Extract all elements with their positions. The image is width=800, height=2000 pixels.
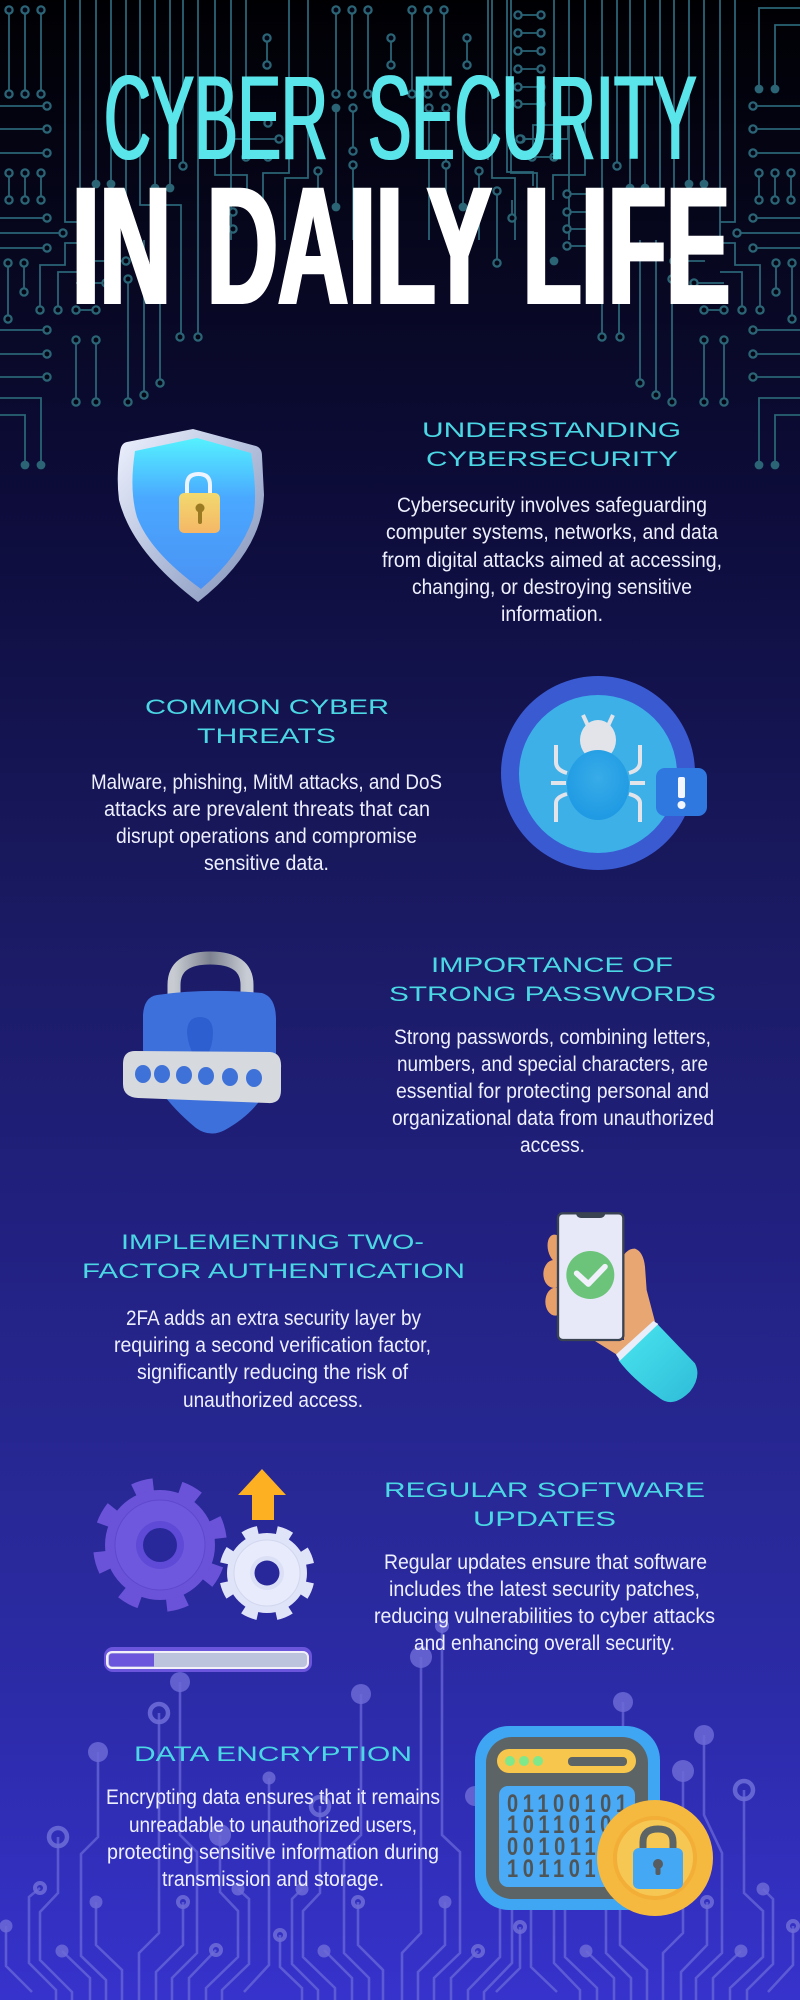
icon: bug alert badge <box>501 676 707 870</box>
body text: protecting sensitive information during <box>107 1840 439 1864</box>
title: CYBER SECURITY <box>104 51 697 185</box>
body text: disrupt operations and compromise <box>116 824 417 848</box>
body text: Malware, phishing, MitM attacks, and DoS <box>91 770 442 794</box>
top circuit pattern <box>0 0 800 469</box>
panel: regular software updates <box>80 1465 715 1672</box>
body text: significantly reducing the risk of <box>137 1360 408 1384</box>
body text <box>374 1550 715 1655</box>
body text: organizational data from unauthorized <box>392 1106 714 1130</box>
heading: COMMON CYBER <box>145 696 389 719</box>
icon: binary window with lock coin <box>475 1726 713 1916</box>
icon: hand holding phone with check <box>543 1213 697 1402</box>
heading: UPDATES <box>473 1508 616 1531</box>
body text: information. <box>501 602 603 626</box>
body text: attacks are prevalent threats that can <box>104 797 430 821</box>
panel: data encryption <box>106 1726 713 1916</box>
icon: binary window with lock coin: 10110100 <box>507 1855 627 1883</box>
panel: importance of strong passwords <box>123 954 716 1157</box>
body text: Cybersecurity involves safeguarding <box>397 493 707 517</box>
body text: computer systems, networks, and data <box>386 520 718 544</box>
body text: Regular updates ensure that software <box>384 1550 707 1574</box>
icon: shield with padlock <box>118 429 264 602</box>
body text: Strong passwords, combining letters, <box>394 1025 711 1049</box>
body text: from digital attacks aimed at accessing, <box>382 548 722 572</box>
heading: UNDERSTANDING <box>422 419 681 442</box>
heading: IMPORTANCE OF <box>431 954 673 977</box>
heading <box>389 954 716 1006</box>
body text: includes the latest security patches, <box>389 1577 700 1601</box>
icon: binary window with lock coin: 00101100 <box>507 1833 627 1861</box>
body text: unauthorized access. <box>183 1388 363 1412</box>
heading <box>82 1231 465 1283</box>
body text: changing, or destroying sensitive <box>412 575 692 599</box>
body text: essential for protecting personal and <box>396 1079 709 1103</box>
icon: binary window with lock coin: 01100101 <box>507 1790 627 1818</box>
heading: IMPLEMENTING TWO- <box>121 1231 424 1254</box>
body text: and enhancing overall security. <box>414 1631 675 1655</box>
body text <box>382 493 722 626</box>
heading <box>384 1479 705 1531</box>
body text: reducing vulnerabilities to cyber attacks <box>374 1604 715 1628</box>
body text: transmission and storage. <box>162 1867 384 1891</box>
body text: sensitive data. <box>204 851 329 875</box>
bottom circuit pattern <box>0 1619 798 2000</box>
icon: binary window with lock coin: 10110100 <box>507 1811 627 1839</box>
heading: STRONG PASSWORDS <box>389 983 716 1006</box>
heading: CYBERSECURITY <box>426 448 678 471</box>
body text: access. <box>520 1133 585 1157</box>
icon: padlock with password bar <box>123 958 281 1134</box>
title: IN DAILY LIFE: DAILY <box>207 151 492 340</box>
heading: THREATS <box>197 725 336 748</box>
body text <box>91 770 442 875</box>
panel: understanding cybersecurity <box>118 419 722 626</box>
body text <box>114 1306 431 1412</box>
heading: DATA ENCRYPTION <box>134 1743 412 1766</box>
heading: FACTOR AUTHENTICATION <box>82 1260 465 1283</box>
heading <box>145 696 389 748</box>
body text: unreadable to unauthorized users, <box>129 1813 417 1837</box>
icon: gears with upload arrow and progress bar <box>80 1465 318 1672</box>
heading: REGULAR SOFTWARE <box>384 1479 705 1502</box>
title: IN DAILY LIFE: IN <box>72 151 171 340</box>
panel: common cyber threats <box>91 676 707 875</box>
panel: implementing two-factor authentication <box>82 1213 697 1412</box>
body text: numbers, and special characters, are <box>397 1052 708 1076</box>
title: CYBER SECURITY: CYBER <box>104 51 328 185</box>
body text: 2FA adds an extra security layer by <box>126 1306 421 1330</box>
body text: requiring a second verification factor, <box>114 1333 431 1357</box>
body text <box>392 1025 714 1157</box>
body text: Encrypting data ensures that it remains <box>106 1785 440 1809</box>
body text <box>106 1785 440 1891</box>
heading <box>422 419 681 471</box>
